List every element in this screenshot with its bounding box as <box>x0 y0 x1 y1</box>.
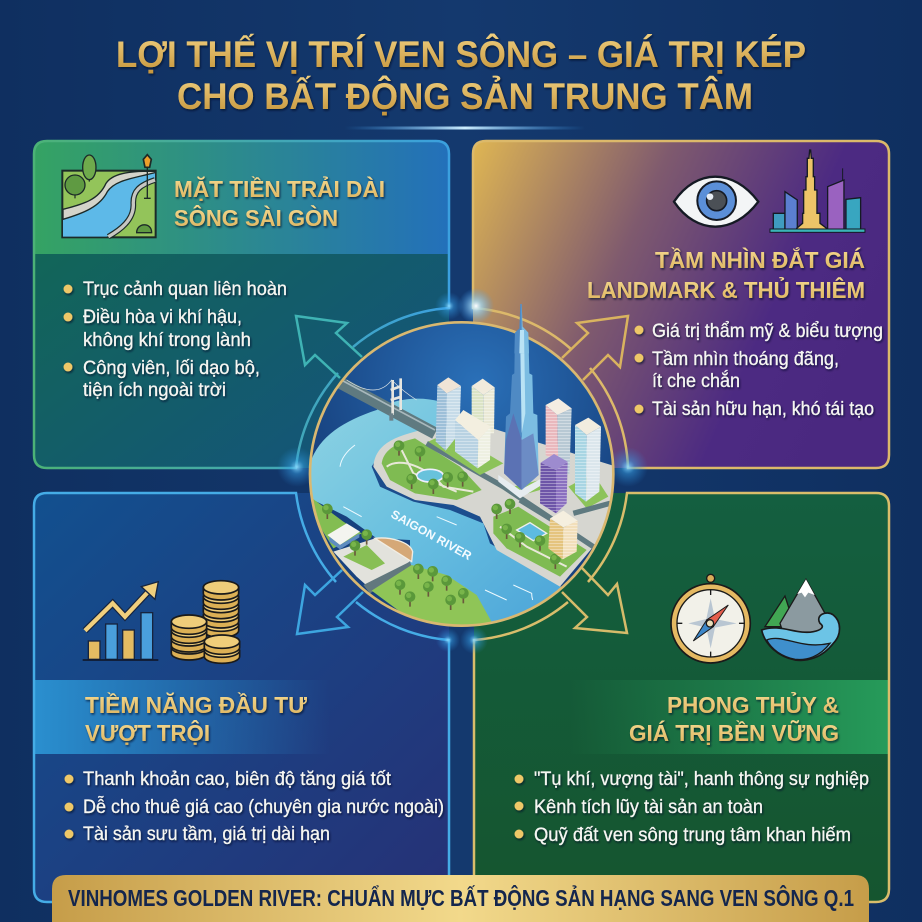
bullet list: Tài sản hữu hạn, khó tái tạo <box>652 399 874 420</box>
landmark spire above ring <box>514 304 529 353</box>
bullet list: Thanh khoản cao, biên độ tăng giá tốt <box>83 769 392 790</box>
bullet list: tiện ích ngoài trời <box>83 380 226 401</box>
icon: river landscape <box>62 155 156 237</box>
icon: coin stacks <box>171 581 240 663</box>
ferry terminal pier <box>327 523 413 593</box>
heading: VƯỢT TRỘI <box>85 719 210 746</box>
heading: SÔNG SÀI GÒN <box>174 204 338 231</box>
bridge <box>340 378 435 433</box>
pale tower <box>575 418 601 502</box>
pink tower <box>546 398 572 475</box>
icon: eye <box>674 177 758 227</box>
heading: LANDMARK & THỦ THIÊM <box>587 275 865 303</box>
bullet list: Trục cảnh quan liên hoàn <box>83 279 287 300</box>
bullet list <box>634 321 883 420</box>
park paths <box>387 447 567 567</box>
bottom banner <box>52 875 869 922</box>
heading <box>85 691 308 746</box>
bullet list: Tầm nhìn thoáng đãng, <box>652 349 839 370</box>
heading: TIỀM NĂNG ĐẦU TƯ <box>85 691 308 718</box>
bullet list: ít che chắn <box>652 370 740 392</box>
bullet list: "Tụ khí, vượng tài", hanh thông sự nghiệp <box>534 769 869 790</box>
heading: PHONG THỦY & <box>667 690 839 718</box>
heading <box>174 174 385 231</box>
panel: investment potential <box>34 493 449 902</box>
bullet list <box>514 769 869 846</box>
bullet list: Tài sản sưu tầm, giá trị dài hạn <box>83 824 330 845</box>
block lawn <box>428 432 503 475</box>
central river city illustration <box>307 304 617 630</box>
arrow: up-right <box>562 316 628 380</box>
city ground <box>373 427 617 587</box>
corner glows <box>277 288 648 654</box>
boat wakes <box>340 445 533 600</box>
icon: growth chart <box>83 582 158 660</box>
bullet list: không khí trong lành <box>83 330 251 351</box>
arrow: down-left <box>297 570 363 634</box>
title <box>116 33 806 117</box>
bullet list: Công viên, lối dạo bộ, <box>83 358 260 379</box>
roads <box>427 443 610 547</box>
icon: mountain and wave <box>762 579 840 660</box>
icon: compass <box>671 574 750 663</box>
heading band <box>570 680 888 754</box>
landmark 81 <box>498 342 540 498</box>
title: CHO BẤT ĐỘNG SẢN TRUNG TÂM <box>177 75 753 117</box>
title glow divider <box>345 126 585 130</box>
heading: MẶT TIỀN TRẢI DÀI <box>174 174 385 202</box>
heading <box>629 690 839 746</box>
river label: SAIGON RIVER <box>389 507 474 563</box>
icon: skyline <box>770 150 865 232</box>
river <box>307 399 567 628</box>
panel: river frontage <box>34 141 449 468</box>
heading band <box>35 680 330 754</box>
title: LỢI THẾ VỊ TRÍ VEN SÔNG – GIÁ TRỊ KÉP <box>116 33 806 75</box>
heading <box>587 246 865 303</box>
tower group <box>436 377 495 468</box>
heading: TẦM NHÌN ĐẮT GIÁ <box>655 246 865 273</box>
bullet list: Điều hòa vi khí hậu, <box>83 307 242 328</box>
cream tower <box>548 511 578 559</box>
purple tower <box>540 454 568 513</box>
bullet list: Giá trị thẩm mỹ & biểu tượng <box>652 321 883 342</box>
arrow: up-left <box>296 316 362 378</box>
bullet list: Dễ cho thuê giá cao (chuyên gia nước ngoài) <box>83 796 444 818</box>
ponds <box>417 469 443 482</box>
arrow: down-right <box>562 568 627 633</box>
park shore left <box>314 499 362 548</box>
bullet list <box>64 769 444 845</box>
bullet list <box>64 279 287 401</box>
bullet list: Kênh tích lũy tài sản an toàn <box>534 797 763 818</box>
panel: prime view <box>473 141 889 468</box>
bullet list: Quỹ đất ven sông trung tâm khan hiếm <box>534 825 851 846</box>
green bank front <box>372 565 493 630</box>
heading: GIÁ TRỊ BỀN VỮNG <box>629 719 839 746</box>
panel: feng shui <box>474 493 889 902</box>
